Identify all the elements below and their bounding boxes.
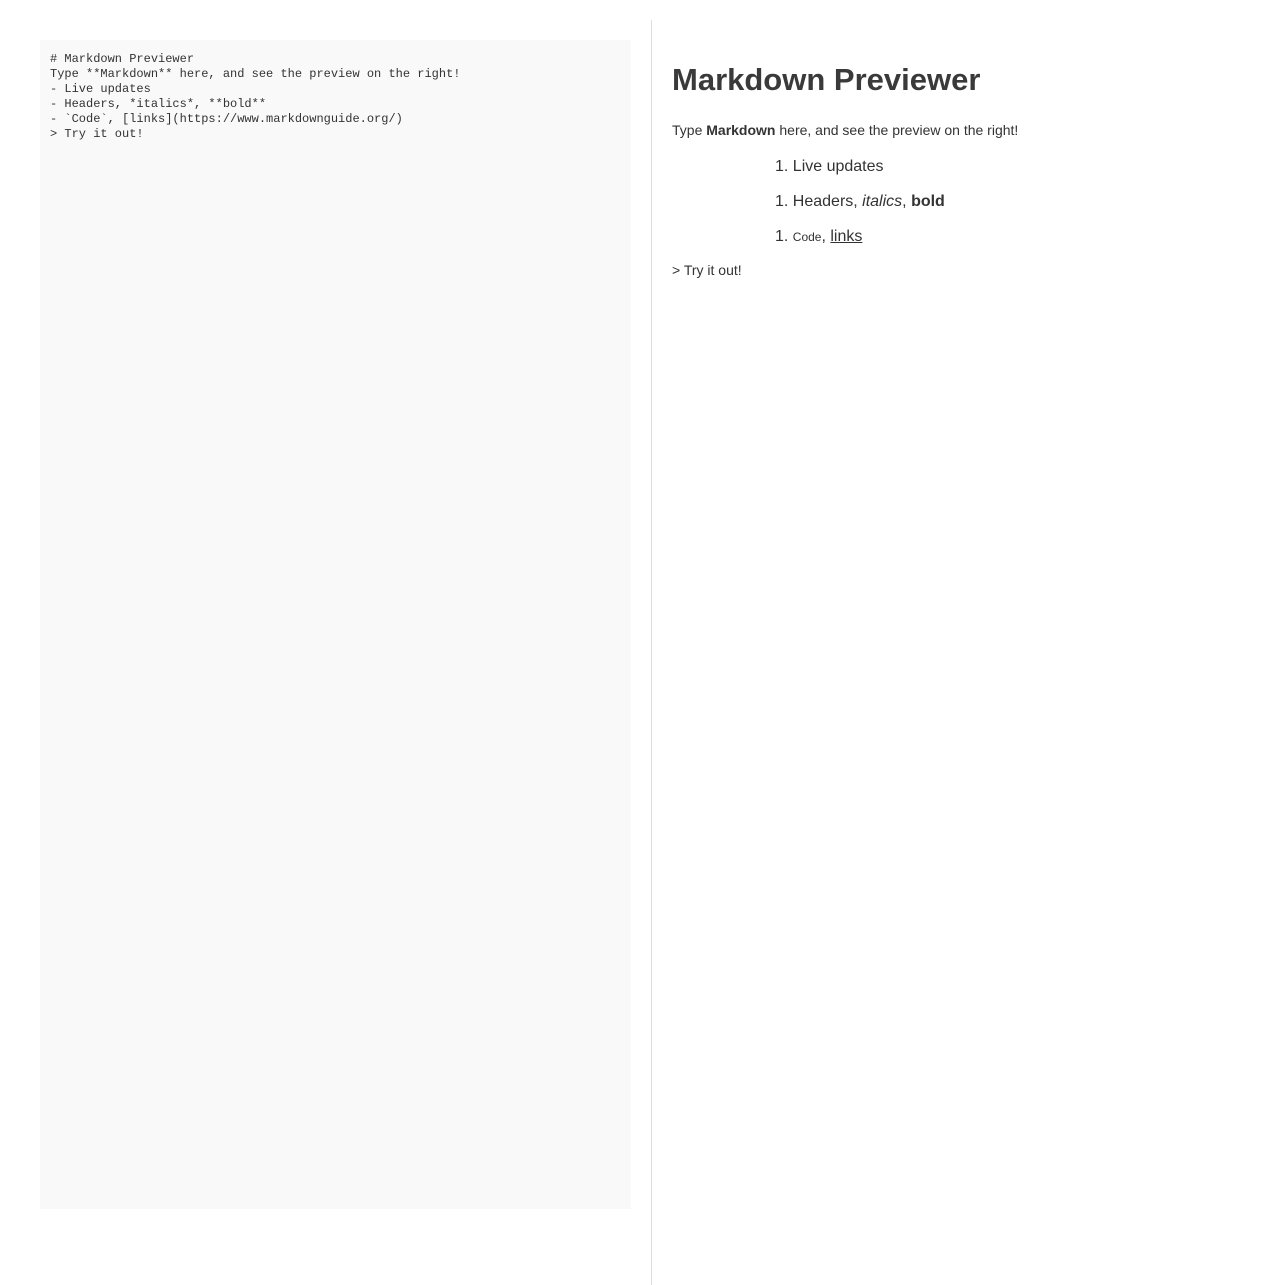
panel: preview <box>672 62 1018 278</box>
list item 1: 1. Live updates <box>775 158 884 175</box>
editor text: # Markdown Previewer Type **Markdown** here, and see the preview on the right! - Live updates - Headers, *italics*, **bold** - `Code`, [links](https://www.markdownguide.org/) > Try it out! <box>50 52 460 141</box>
panel: editor <box>40 40 631 1209</box>
list item 2: 1. Headers, italics, bold <box>775 193 945 210</box>
list item 3: 1. Code, links <box>775 228 862 245</box>
paragraph: Type Markdown here, and see the preview on the right! <box>672 122 1018 138</box>
blockquote line: > Try it out! <box>672 262 742 278</box>
heading: Markdown Previewer <box>672 62 980 97</box>
divider <box>651 20 652 1285</box>
